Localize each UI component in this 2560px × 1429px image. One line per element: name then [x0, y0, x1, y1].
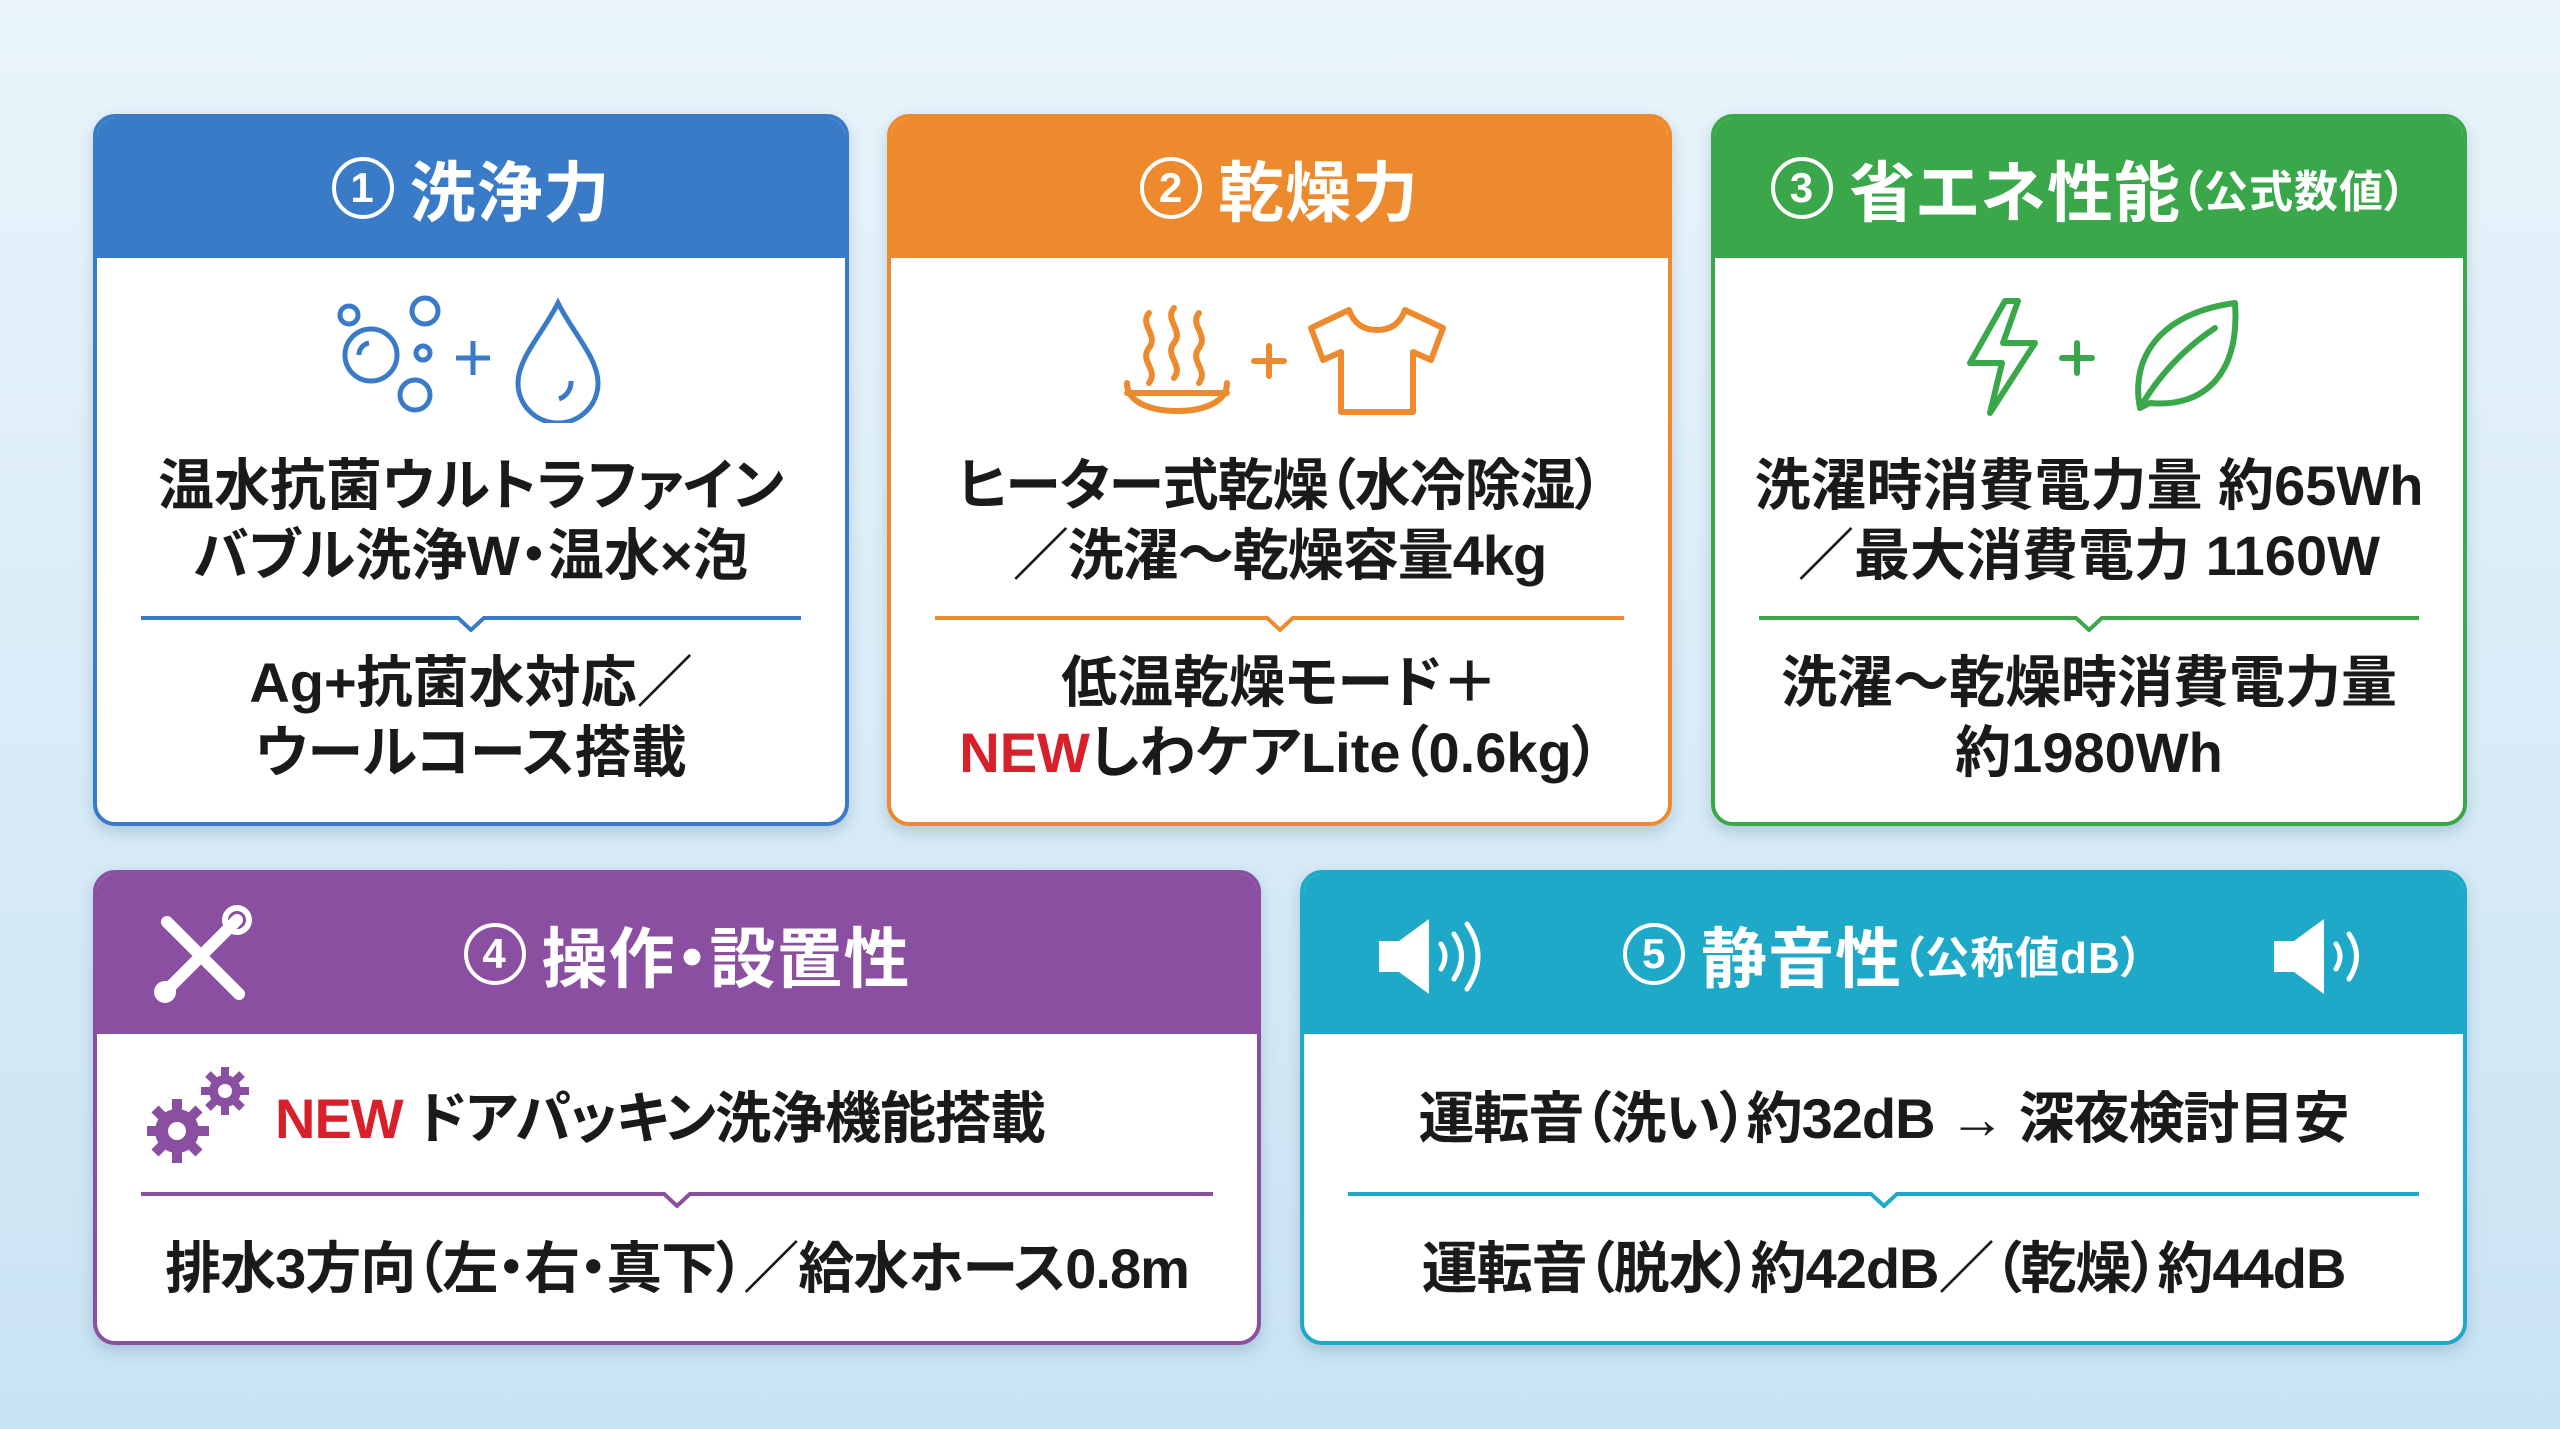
panel: operation and installation — [93, 870, 1261, 1345]
text: main feature — [1755, 454, 2423, 587]
heading: quietness: 5 — [1642, 930, 1666, 977]
text: sub feature — [1781, 651, 2397, 784]
panel: energy saving — [1711, 114, 2467, 826]
icon: speaker right — [2274, 919, 2360, 994]
icon: heat plus shirt — [1124, 305, 1446, 415]
text: main feature: バブル洗浄W・温水×泡 — [193, 524, 749, 587]
icon: bubbles plus drop — [338, 296, 600, 423]
text: main feature: ／洗濯～乾燥容量4kg — [1013, 524, 1546, 587]
heading: energy saving: （公式数値） — [2181, 168, 2407, 217]
divider — [1348, 1192, 2419, 1196]
text: main feature: 運転音（洗い）約32dB → 深夜検討目安 — [1418, 1087, 2349, 1150]
text: main feature: ヒーター式乾燥（水冷除湿） — [957, 454, 1602, 517]
heading: energy saving: 省エネ性能 — [1849, 156, 2181, 230]
divider — [935, 616, 1624, 620]
text: sub feature: ウールコース搭載 — [255, 721, 687, 784]
text: sub feature — [249, 651, 693, 784]
divider — [141, 616, 801, 620]
heading: energy saving: 3 — [1790, 164, 1814, 211]
icon: bolt plus leaf — [1967, 298, 2238, 416]
text: sub feature: 低温乾燥モード＋ — [1061, 651, 1498, 714]
text: sub feature: 排水3方向（左・右・真下）／給水ホース0.8m — [165, 1237, 1189, 1300]
icon: gears — [147, 1067, 249, 1163]
icon: speaker left — [1379, 919, 1481, 994]
heading: drying: 2 — [1159, 164, 1183, 211]
divider — [1759, 616, 2419, 620]
text: main feature: ／最大消費電力 1160W — [1798, 524, 2380, 587]
heading: operation and installation: 4 — [482, 930, 507, 977]
heading: washing power: 1 — [350, 164, 375, 211]
text: sub feature — [959, 651, 1600, 784]
text: main feature — [158, 454, 784, 587]
heading: energy saving — [1715, 118, 2463, 258]
heading: quietness — [1304, 874, 2463, 1034]
heading: quietness: 静音性 — [1701, 922, 1902, 996]
text: sub feature: 約1980Wh — [1955, 721, 2223, 784]
text: main feature — [957, 454, 1602, 587]
icon: tools — [154, 905, 252, 1003]
heading: operation and installation: 操作・設置性 — [542, 922, 910, 996]
divider — [141, 1192, 1213, 1196]
text: main feature: NEW ドアパッキン洗浄機能搭載 — [275, 1087, 1045, 1150]
text: sub feature: Ag+抗菌水対応／ — [249, 651, 693, 714]
panel: quietness — [1300, 870, 2467, 1345]
heading: washing power — [97, 118, 845, 258]
heading: quietness: （公称値dB） — [1902, 934, 2144, 983]
panel: washing power — [93, 114, 849, 826]
text: main feature: 洗濯時消費電力量 約65Wh — [1755, 454, 2423, 517]
heading: drying — [891, 118, 1668, 258]
text: sub feature: 運転音（脱水）約42dB／（乾燥）約44dB — [1422, 1237, 2345, 1300]
heading: drying: 乾燥力 — [1218, 156, 1419, 230]
text: main feature: 温水抗菌ウルトラファイン — [158, 454, 784, 517]
heading: washing power: 洗浄力 — [410, 156, 610, 230]
text: sub feature: NEWしわケアLite（0.6kg） — [959, 721, 1600, 784]
panel: drying — [887, 114, 1672, 826]
text: sub feature: 洗濯～乾燥時消費電力量 — [1781, 651, 2397, 714]
heading: operation and installation — [97, 874, 1257, 1034]
